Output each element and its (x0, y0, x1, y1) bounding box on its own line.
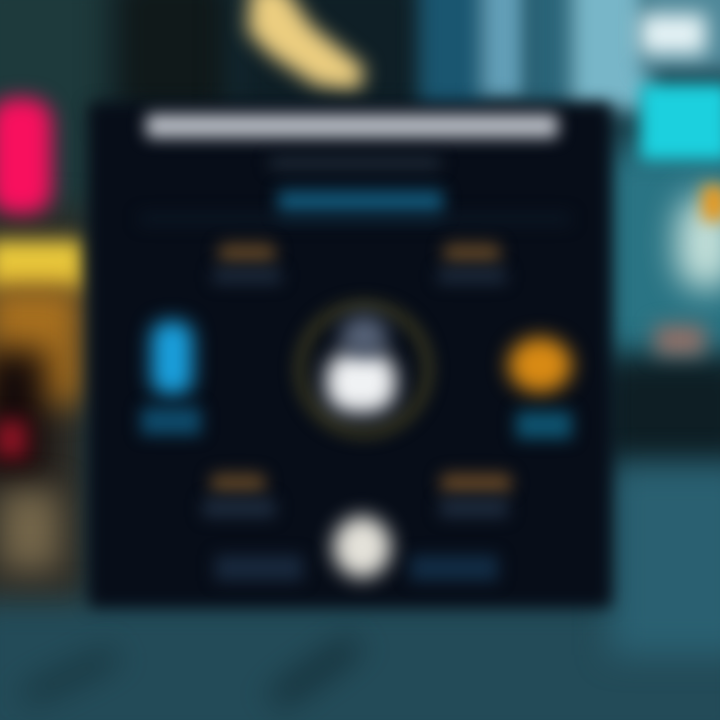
bottom-left caption (215, 555, 303, 581)
tan lower-left shape (0, 490, 60, 570)
blue label (516, 411, 572, 439)
grey head (340, 315, 388, 357)
grey caption (213, 269, 281, 283)
bottom white circle icon (333, 516, 391, 578)
bottom-right caption (410, 555, 498, 581)
blue icon (151, 321, 193, 395)
central circle icon (288, 294, 440, 445)
yellow storefront (0, 240, 84, 290)
right reddish light (655, 325, 705, 355)
orange label (210, 473, 266, 493)
right orange accent (702, 185, 720, 221)
left node (132, 306, 210, 444)
banana-shaped yellow shape at top (232, 0, 378, 102)
orange label (218, 243, 276, 263)
grey caption (203, 499, 275, 517)
grey caption (440, 499, 508, 517)
olive ring (296, 301, 432, 437)
right node (493, 322, 587, 449)
bottom-right node (432, 463, 520, 522)
top-right node (436, 234, 508, 288)
orange storefront (0, 285, 82, 405)
grey caption (438, 269, 506, 283)
orange icon (508, 337, 572, 393)
pink neon sign (0, 98, 52, 214)
faint text line (140, 214, 570, 224)
orange label (440, 473, 512, 493)
main dark panel (88, 102, 612, 608)
subtitle (270, 157, 440, 169)
white figure (326, 351, 396, 413)
blue highlighted heading (278, 190, 443, 216)
title bar (146, 114, 558, 138)
cyan sign (640, 84, 720, 160)
bottom-left node (199, 464, 279, 522)
top-left node (210, 234, 284, 288)
blue label (141, 407, 201, 435)
orange label (443, 243, 501, 263)
right pale circle sign (676, 195, 720, 290)
dark figure with red (0, 350, 46, 480)
